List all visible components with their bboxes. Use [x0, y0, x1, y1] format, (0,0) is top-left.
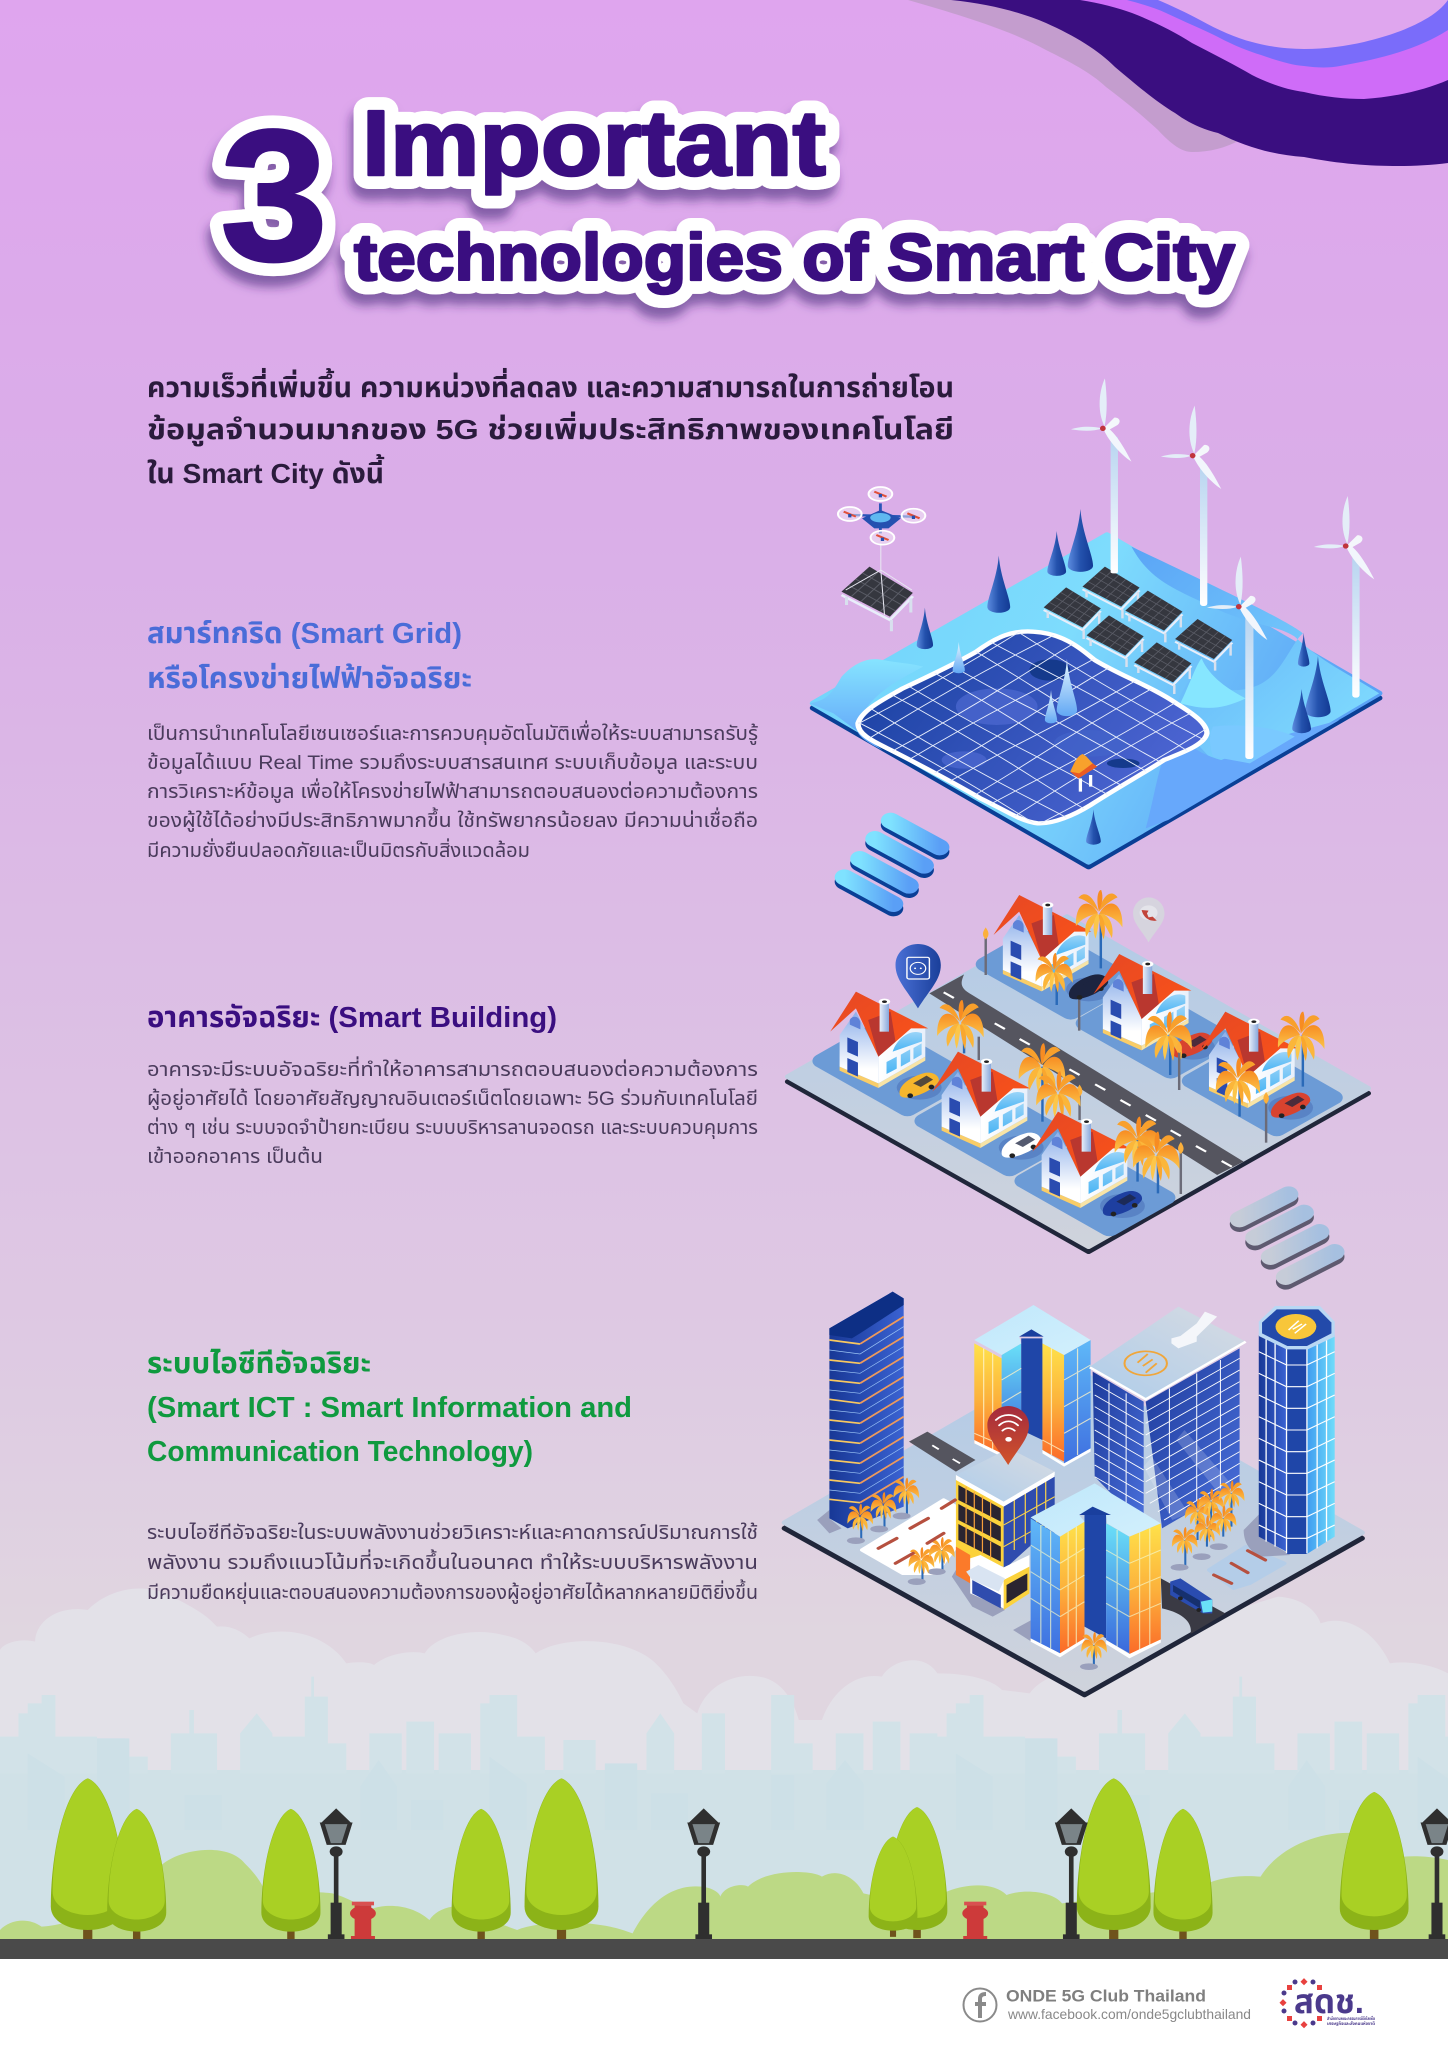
- facebook url: www.facebook.com/onde5gclubthailand: [1007, 2006, 1251, 2022]
- platform base: [784, 1362, 1362, 1695]
- house row front: [830, 992, 1184, 1218]
- bushes: [0, 1833, 1448, 1939]
- wind turbines: [1071, 378, 1374, 759]
- fire hydrants: [350, 1902, 988, 1939]
- title: technologies of Smart City: [354, 220, 1235, 294]
- text block: smart ICT: ระบบไอซีทีอัจฉริยะในระบบพลังงานช่วยวิเคราะห์และคาดการณ์ปริมาณการใช้: [147, 1521, 758, 1544]
- text block: smart grid: การวิเคราะห์ข้อมูล เพื่อให้โครงข่ายไฟฟ้าสามารถตอบสนองต่อความต้องการ: [147, 778, 758, 804]
- tall dark tower: [829, 1292, 904, 1528]
- front gold and glass tower: [1031, 1483, 1161, 1658]
- facebook page name: ONDE 5G Club Thailand: [1006, 1988, 1206, 2006]
- title: 3: [220, 91, 328, 300]
- heading: smart grid: หรือโครงข่ายไฟฟ้าอัจฉริยะ: [147, 663, 472, 695]
- road: [0, 1939, 1448, 1959]
- intro text: ความเร็วที่เพิ่มขึ้น ความหน่วงที่ลดลง และความสามารถในการถ่ายโอน: [147, 367, 954, 403]
- text block: smart ICT: [147, 1521, 758, 1605]
- text block: smart building: ผู้อยู่อาศัยได้ โดยอาศัยสัญญาณอินเตอร์เน็ตโดยเฉพาะ 5G ร่วมกับเทคโนโลยี: [147, 1087, 758, 1111]
- title: technologies of Smart City: [354, 220, 1235, 294]
- illustration: smart grid: [810, 378, 1379, 932]
- title: [220, 91, 1235, 300]
- gold and glass tower back: [974, 1305, 1091, 1467]
- intro text: ใน Smart City ดังนี้: [147, 453, 385, 489]
- buoy: [1070, 754, 1097, 792]
- clouds: [0, 1589, 1448, 1830]
- text block: smart ICT: มีความยืดหยุ่นและตอบสนองความต้องการของผู้อยู่อาศัยได้หลากหลายมิติยิ่งขึ้น: [147, 1579, 758, 1605]
- pin: wifi: [987, 1406, 1029, 1465]
- illustration: smart building: [788, 890, 1368, 1282]
- lots: [822, 932, 1333, 1229]
- text block: smart building: ต่าง ๆ เช่น ระบบจดจำป้ายทะเบียน ระบบบริหารลานจอดรถ และระบบควบคุมการ: [147, 1116, 758, 1139]
- platform base: [788, 917, 1368, 1252]
- heading: smart grid: สมาร์ทกริด (Smart Grid): [147, 618, 462, 650]
- detached solar panel: [841, 567, 913, 631]
- roads and plazas: [817, 1432, 1291, 1642]
- title: 3: [220, 91, 328, 300]
- bus: [1170, 1578, 1212, 1613]
- drone: [838, 487, 925, 615]
- text block: smart building: [147, 1056, 758, 1168]
- text block: smart ICT: พลังงาน รวมถึงแนวโน้มที่จะเกิดขึ้นในอนาคต ทำให้ระบบบริหารพลังงาน: [147, 1549, 758, 1574]
- pin: power socket: [896, 944, 941, 1008]
- road: [929, 974, 1244, 1175]
- heading: smart ICT: [147, 1348, 632, 1468]
- heading: smart ICT: ระบบไอซีทีอัจฉริยะ: [147, 1348, 371, 1380]
- text block: smart grid: เป็นการนำเทคโนโลยีเซนเซอร์และการควบคุมอัตโนมัติเพื่อให้ระบบสามารถรับรู้: [147, 720, 758, 746]
- title: Important: [362, 91, 826, 195]
- logo: สดช.: สำนักงานคณะกรรมการดิจิทัลเพื่อ: [1327, 2015, 1376, 2021]
- palm trees: [847, 1478, 1244, 1670]
- steps: [844, 821, 940, 908]
- lamps back: [979, 927, 1082, 1120]
- title: Important: [362, 91, 826, 195]
- glass office with helipad: [1090, 1307, 1246, 1528]
- text block: smart grid: ข้อมูลได้แบบ Real Time รวมถึงระบบสารสนเทศ ระบบเก็บข้อมูล และระบบ: [147, 751, 758, 775]
- intro text: ข้อมูลจำนวนมากของ 5G ช่วยเพิ่มประสิทธิภาพของเทคโนโลยี: [147, 411, 954, 447]
- benches: [878, 1500, 1265, 1583]
- heading: smart grid: [147, 618, 472, 695]
- heading: smart building: อาคารอัจฉริยะ (Smart Building): [147, 1002, 557, 1034]
- steps: [1240, 1194, 1335, 1282]
- heading: smart ICT: (Smart ICT : Smart Information and: [147, 1392, 632, 1424]
- text block: smart grid: มีความยั่งยืนปลอดภัยและเป็นมิตรกับสิ่งแวดล้อม: [147, 838, 530, 862]
- trees: [51, 1778, 1409, 1940]
- lake: [855, 629, 1210, 826]
- intro text: [147, 367, 954, 489]
- icon: facebook: [964, 1988, 996, 2022]
- hills: [810, 547, 1379, 828]
- text block: smart building: เข้าออกอาคาร เป็นต้น: [147, 1145, 323, 1168]
- text block: smart grid: ของผู้ใช้ได้อย่างมีประสิทธิภาพมากขึ้น ใช้ทรัพยากรน้อยลง มีความน่าเชื่อถือ: [147, 807, 758, 833]
- decorative top-right waves: [908, 0, 1448, 166]
- house row back: [993, 890, 1325, 1143]
- street lamps: [321, 1808, 1448, 1940]
- yellow mid-rise building: [956, 1448, 1055, 1610]
- cone trees: [917, 509, 1331, 845]
- pin: phone globe: [1133, 897, 1164, 942]
- solar panels: [1044, 567, 1232, 694]
- illustration: smart ICT: [784, 1292, 1362, 1695]
- octagonal tower: [1259, 1306, 1335, 1554]
- logo: สดช.: สดช.: [1294, 1983, 1364, 2021]
- platform base: [813, 535, 1379, 867]
- logo: สดช.: [1279, 1978, 1376, 2028]
- heading: smart ICT: Communication Technology): [147, 1436, 533, 1468]
- text block: smart grid: [147, 720, 758, 862]
- text block: smart building: อาคารจะมีระบบอัจฉริยะที่ทำให้อาคารสามารถตอบสนองต่อความต้องการ: [147, 1056, 758, 1081]
- footer: [0, 1959, 1448, 2048]
- city skyline: [0, 1677, 1448, 2043]
- logo: สดช.: เศรษฐกิจและสังคมแห่งชาติ: [1327, 2021, 1375, 2026]
